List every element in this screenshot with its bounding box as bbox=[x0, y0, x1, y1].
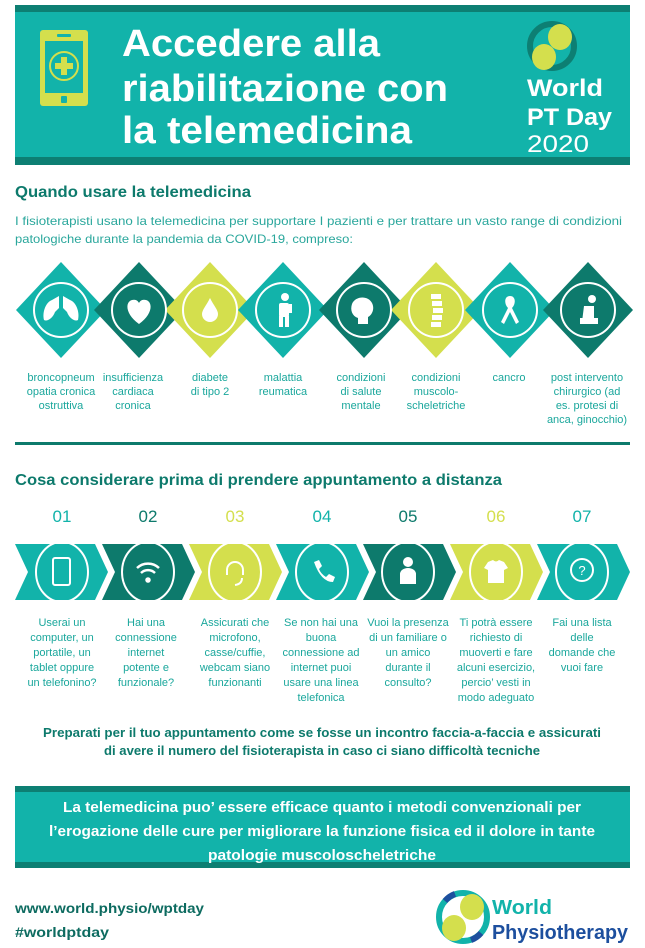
preparation note: di avere il numero del fisioterapista in caso ci siano difficoltà tecniche bbox=[104, 743, 540, 758]
step descriptions: usare una linea bbox=[283, 677, 359, 689]
icon: t-shirt bbox=[484, 560, 508, 583]
step descriptions: telefonica bbox=[297, 692, 345, 704]
banner: key message bbox=[15, 786, 630, 868]
condition labels: di salute bbox=[341, 386, 381, 398]
condition labels bbox=[27, 372, 627, 426]
logo: World PT Day 2020: PT Day bbox=[527, 104, 613, 131]
condition labels: anca, ginocchio) bbox=[547, 414, 627, 426]
banner: key message: patologie muscoloscheletriche bbox=[208, 847, 436, 864]
condition labels: cronica bbox=[115, 400, 152, 412]
condition labels: muscolo- bbox=[414, 386, 459, 398]
logo: World Physiotherapy: World bbox=[492, 897, 552, 919]
step descriptions: casse/cuffie, bbox=[205, 647, 265, 659]
step descriptions: Vuoi la presenza bbox=[367, 617, 450, 629]
step numbers: 04 bbox=[313, 507, 331, 526]
title: riabilitazione con bbox=[122, 68, 448, 110]
step descriptions: Fai una lista bbox=[552, 617, 613, 629]
condition labels: scheletriche bbox=[407, 400, 465, 412]
condition labels: mentale bbox=[341, 400, 381, 412]
condition labels: diabete bbox=[192, 372, 228, 384]
condition labels: insufficienza bbox=[103, 372, 164, 384]
intro paragraph: I fisioterapisti usano la telemedicina per supportare I pazienti e per trattare un vasto range di condizioni bbox=[15, 214, 622, 228]
step descriptions: portatile, un bbox=[33, 647, 91, 659]
footer links bbox=[14, 900, 204, 940]
step descriptions: Userai un bbox=[38, 617, 86, 629]
heading: Cosa considerare: Cosa considerare prima di prendere appuntamento a distanza bbox=[15, 472, 502, 489]
icon: question bubble bbox=[571, 559, 593, 581]
condition labels: cancro bbox=[492, 372, 526, 384]
logo: World Physiotherapy: Physiotherapy bbox=[492, 922, 629, 944]
icon: phone handset bbox=[314, 560, 335, 582]
step descriptions: delle bbox=[570, 632, 594, 644]
icon: seated person bbox=[580, 295, 598, 324]
banner: key message: l’erogazione delle cure per migliorare la funzione fisica ed il dolore in tante bbox=[49, 823, 595, 840]
condition labels: ostruttiva bbox=[39, 400, 84, 412]
step descriptions: potente e bbox=[123, 662, 169, 674]
preparation note bbox=[43, 725, 601, 758]
step numbers bbox=[53, 507, 591, 526]
logo: World Physiotherapy bbox=[439, 893, 629, 944]
preparation note: Preparati per il tuo appuntamento come se fosse un incontro faccia-a-faccia e assicurati bbox=[43, 725, 601, 740]
icon: ribbon bbox=[501, 296, 519, 324]
condition labels: condizioni bbox=[412, 372, 460, 384]
step descriptions: vuoi fare bbox=[561, 662, 603, 674]
step descriptions: computer, un bbox=[30, 632, 94, 644]
condition labels: di tipo 2 bbox=[191, 386, 229, 398]
icon: wifi bbox=[137, 564, 159, 582]
condition labels: cardiaca bbox=[112, 386, 155, 398]
step numbers: 05 bbox=[399, 507, 417, 526]
step descriptions: microfono, bbox=[209, 632, 261, 644]
step descriptions: internet puoi bbox=[291, 662, 351, 674]
step descriptions: tablet oppure bbox=[30, 662, 94, 674]
icon: tablet bbox=[53, 558, 70, 585]
icon: headset bbox=[227, 562, 243, 585]
step descriptions: un telefonino? bbox=[27, 677, 97, 689]
footer links: #worldptday bbox=[15, 924, 109, 940]
icon: heart bbox=[127, 300, 151, 324]
logo: World PT Day 2020 bbox=[527, 24, 613, 158]
condition labels: post intervento bbox=[551, 372, 623, 384]
step descriptions: richiesto di bbox=[470, 632, 522, 644]
step descriptions: Assicurati che bbox=[201, 617, 269, 629]
logo: World PT Day 2020: World bbox=[527, 75, 603, 102]
banner: key message: La telemedicina puo’ essere efficace quanto i metodi convenzionali per bbox=[63, 799, 581, 816]
step descriptions bbox=[27, 617, 615, 704]
condition labels: condizioni bbox=[337, 372, 385, 384]
step descriptions: internet bbox=[128, 647, 164, 659]
step numbers: 02 bbox=[139, 507, 157, 526]
step descriptions: durante il bbox=[385, 662, 431, 674]
icon: lungs bbox=[43, 296, 79, 321]
step descriptions: di un familiare o bbox=[369, 632, 447, 644]
heading: Quando usare la telemedicina: Quando usare la telemedicina bbox=[15, 184, 251, 201]
step descriptions: un amico bbox=[386, 647, 430, 659]
condition labels: chirurgico (ad bbox=[554, 386, 620, 398]
step descriptions: consulto? bbox=[384, 677, 432, 689]
condition labels: opatia cronica bbox=[27, 386, 96, 398]
condition labels: es. protesi di bbox=[556, 400, 618, 412]
icon: question bubble: ? bbox=[578, 563, 586, 578]
condition labels: malattia bbox=[264, 372, 303, 384]
title: la telemedicina bbox=[122, 110, 413, 152]
step descriptions: Se non hai una bbox=[284, 617, 359, 629]
step descriptions: buona bbox=[306, 632, 337, 644]
step descriptions: muoverti e fare bbox=[459, 647, 533, 659]
step descriptions: Hai una bbox=[127, 617, 166, 629]
step descriptions: domande che bbox=[549, 647, 615, 659]
step numbers: 03 bbox=[226, 507, 244, 526]
condition labels: reumatica bbox=[259, 386, 308, 398]
icon: spine bbox=[431, 294, 443, 327]
icon: drop bbox=[202, 298, 218, 322]
intro paragraph bbox=[15, 214, 622, 246]
header panel bbox=[15, 5, 630, 165]
title bbox=[122, 23, 448, 152]
icon: person bbox=[279, 293, 292, 327]
conditions diamonds bbox=[16, 262, 633, 358]
title: Accedere alla bbox=[122, 23, 381, 65]
step descriptions: modo adeguato bbox=[458, 692, 534, 704]
step numbers: 07 bbox=[573, 507, 591, 526]
step numbers: 01 bbox=[53, 507, 71, 526]
step descriptions: funzionanti bbox=[208, 677, 262, 689]
condition labels: broncopneum bbox=[27, 372, 95, 384]
step descriptions: connessione ad bbox=[282, 647, 360, 659]
step descriptions: Ti potrà essere bbox=[460, 617, 532, 629]
step descriptions: funzionale? bbox=[118, 677, 174, 689]
step descriptions: alcuni esercizio, bbox=[457, 662, 535, 674]
step descriptions: connessione bbox=[115, 632, 177, 644]
logo: World PT Day 2020: 2020 bbox=[527, 131, 589, 158]
icon: head bbox=[351, 297, 373, 324]
step numbers: 06 bbox=[487, 507, 505, 526]
footer links: www.world.physio/wptday bbox=[14, 900, 204, 916]
icon: person bust bbox=[400, 557, 416, 584]
step descriptions: webcam siano bbox=[199, 662, 270, 674]
icon: phone with plus bbox=[40, 30, 88, 106]
chevrons bbox=[15, 542, 630, 602]
step descriptions: percio’ vesti in bbox=[461, 677, 531, 689]
intro paragraph: patologiche durante la pandemia da COVID-19, compreso: bbox=[15, 232, 353, 246]
